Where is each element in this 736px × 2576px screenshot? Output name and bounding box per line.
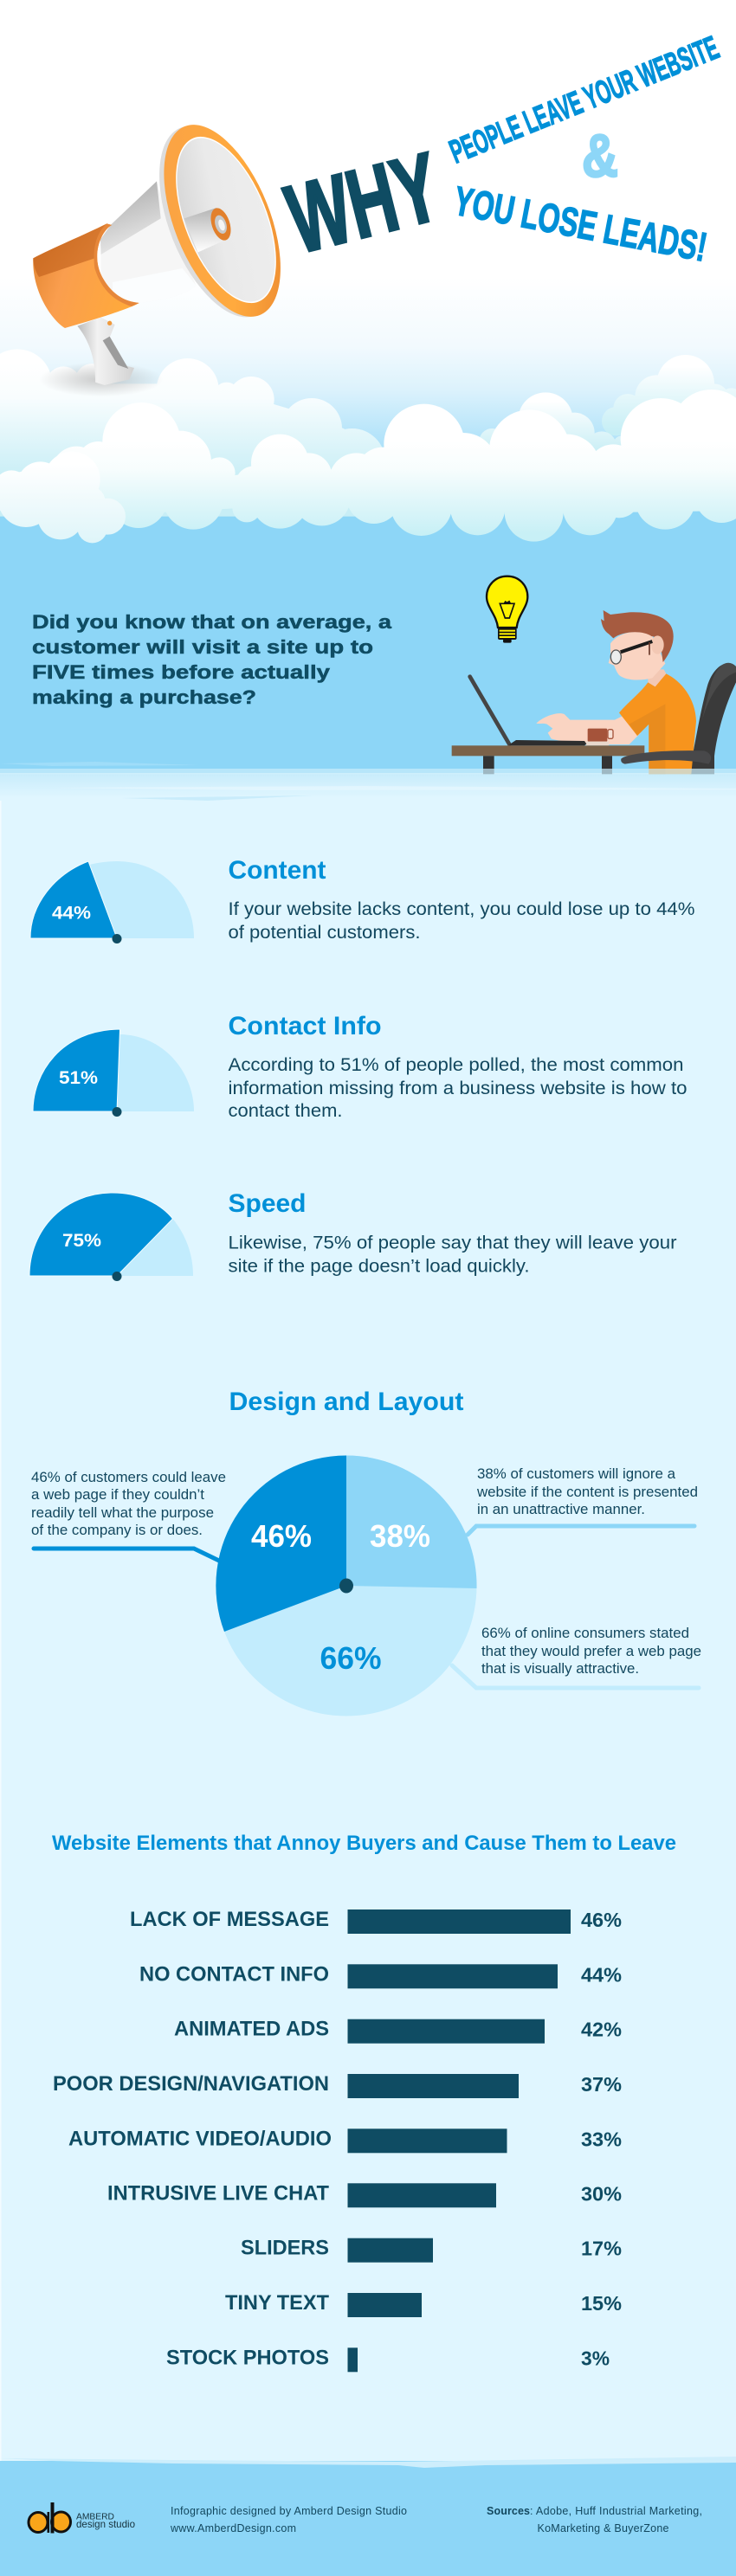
- row: live chat: INTRUSIVE LIVE CHAT: [107, 2181, 329, 2205]
- text: speed: Speed: [229, 1189, 307, 1218]
- intro question text: Did you know that on average, a: [32, 611, 392, 633]
- front clouds: [0, 390, 736, 543]
- icon: megaphone: [33, 109, 304, 396]
- text: content: If your website lacks content, you could lose up to 44%: [229, 899, 694, 919]
- logo: AMBERD: [76, 2512, 114, 2522]
- logo: [29, 2502, 135, 2533]
- text: content: of potential customers.: [229, 923, 421, 943]
- gauge: speed 75%: [29, 1193, 193, 1281]
- shirt: [619, 673, 696, 774]
- intro question text: FIVE times before actually: [32, 661, 331, 683]
- pie chart: 38%: [370, 1518, 430, 1554]
- hair: [601, 610, 674, 662]
- glasses: [621, 641, 652, 652]
- callout: 46%: 46% of customers could leave: [31, 1470, 226, 1485]
- text: contact info: According to 51% of people polled, the most common: [229, 1055, 684, 1075]
- icon: ab mark: [29, 2502, 71, 2533]
- left edge strip: [0, 801, 2, 2461]
- footer credit: [170, 2505, 407, 2534]
- intro question text: making a purchase?: [32, 686, 256, 708]
- row: poor design: [53, 2072, 622, 2098]
- page body background: [0, 773, 736, 2470]
- heading: design and layout: Design and Layout: [229, 1388, 464, 1416]
- bell rim: [135, 110, 300, 333]
- neck: [648, 669, 666, 688]
- row: poor design: POOR DESIGN/NAVIGATION: [53, 2072, 329, 2096]
- gauge: content 44%: 44%: [52, 904, 91, 923]
- row: automatic video: [68, 2127, 622, 2153]
- bar chart: [53, 1908, 622, 2372]
- text: speed: [229, 1189, 677, 1276]
- back clouds: [0, 349, 736, 517]
- callout: 38%: 38% of customers will ignore a: [477, 1466, 676, 1482]
- illustration: person at laptop: [452, 610, 736, 774]
- heading: website elements: Website Elements that Annoy Buyers and Cause Them to Leave: [52, 1832, 676, 1855]
- callout: 46%: [31, 1470, 226, 1561]
- handle: [77, 318, 134, 385]
- sky background: [0, 0, 736, 779]
- callout: 66%: that they would prefer a web page: [481, 1644, 701, 1659]
- callout: 38%: in an unattractive manner.: [477, 1502, 645, 1517]
- callout: 66%: 66% of online consumers stated: [481, 1626, 689, 1641]
- row: lack of message: LACK OF MESSAGE: [130, 1908, 329, 1931]
- row: automatic video: 33%: [581, 2128, 622, 2150]
- pie chart: [216, 1455, 477, 1716]
- row: stock photos: STOCK PHOTOS: [166, 2346, 329, 2369]
- footer sources: KoMarketing & BuyerZone: [537, 2522, 669, 2534]
- row: lack of message: 46%: [581, 1909, 622, 1931]
- footer sources: [487, 2505, 702, 2534]
- row: no contact info: [139, 1962, 622, 1988]
- row: live chat: 30%: [581, 2182, 622, 2205]
- callout: 38%: [468, 1466, 698, 1535]
- row: sliders: 17%: [581, 2238, 622, 2260]
- gauge: speed 75%: 75%: [62, 1231, 101, 1251]
- table: [452, 745, 644, 756]
- gauge: contact info 51%: 51%: [59, 1068, 98, 1088]
- row: stock photos: [166, 2346, 610, 2372]
- row: tiny text: 15%: [581, 2292, 622, 2315]
- text: contact info: information missing from a business website is how to: [229, 1079, 688, 1098]
- title: ampersand: &: [582, 122, 618, 190]
- icon: light bulb: [487, 576, 527, 643]
- callout: 46%: readily tell what the purpose: [31, 1505, 214, 1521]
- row: animated ads: 42%: [581, 2019, 622, 2041]
- chair back: [690, 663, 736, 774]
- shadow on cloud: [39, 362, 163, 396]
- orange grip: [33, 223, 139, 328]
- row: poor design: 37%: [581, 2073, 622, 2096]
- text: content: [229, 856, 694, 943]
- text: contact info: Contact Info: [229, 1012, 381, 1040]
- intro question text: [32, 611, 392, 708]
- ear: [651, 635, 664, 654]
- row: automatic video: AUTOMATIC VIDEO/AUDIO: [68, 2127, 332, 2150]
- row: no contact info: 44%: [581, 1963, 622, 1986]
- laptop: [470, 677, 509, 744]
- callout: 66%: that is visually attractive.: [481, 1661, 639, 1677]
- callout: 66%: [452, 1626, 701, 1688]
- arm: [536, 713, 641, 744]
- row: animated ads: [174, 2018, 622, 2044]
- row: tiny text: TINY TEXT: [225, 2291, 329, 2315]
- text: contact info: contact them.: [229, 1101, 343, 1121]
- row: lack of message: [130, 1908, 622, 1934]
- row: no contact info: NO CONTACT INFO: [139, 1962, 329, 1986]
- cone: [100, 181, 197, 303]
- text: speed: Likewise, 75% of people say that they will leave your: [229, 1233, 677, 1253]
- face: [609, 632, 665, 680]
- callout: 46%: a web page if they couldn’t: [31, 1487, 204, 1503]
- intro question text: customer will visit a site up to: [32, 636, 373, 658]
- footer sources: : Adobe, Huff Industrial Marketing,: [530, 2505, 702, 2517]
- footer credit: www.AmberdDesign.com: [170, 2522, 296, 2534]
- row: stock photos: 3%: [581, 2347, 610, 2369]
- text: contact info: [229, 1012, 688, 1121]
- text: content: Content: [229, 856, 326, 885]
- pie chart: 46%: [251, 1518, 312, 1554]
- coffee cup: [588, 729, 607, 742]
- logo: design studio: [76, 2518, 135, 2530]
- callout: 38%: website if the content is presented: [476, 1484, 698, 1500]
- pie chart: 66%: [320, 1640, 381, 1676]
- title: WHY: WHY: [277, 132, 450, 274]
- row: live chat: [107, 2181, 622, 2207]
- footer credit: Infographic designed by Amberd Design Studio: [171, 2505, 407, 2517]
- text: speed: site if the page doesn’t load quickly.: [229, 1257, 530, 1276]
- chair seat: [621, 750, 711, 764]
- row: sliders: [241, 2237, 622, 2263]
- gauge: contact info 51%: [33, 1029, 194, 1117]
- bell tube: [184, 208, 227, 253]
- footer band: [0, 2457, 736, 2576]
- gauge: content 44%: [30, 861, 194, 943]
- water line: [0, 762, 736, 801]
- row: animated ads: ANIMATED ADS: [174, 2018, 329, 2041]
- row: sliders: SLIDERS: [241, 2237, 329, 2260]
- footer sources: Sources: [487, 2505, 530, 2517]
- callout: 46%: of the company is or does.: [31, 1523, 203, 1538]
- row: tiny text: [225, 2291, 622, 2317]
